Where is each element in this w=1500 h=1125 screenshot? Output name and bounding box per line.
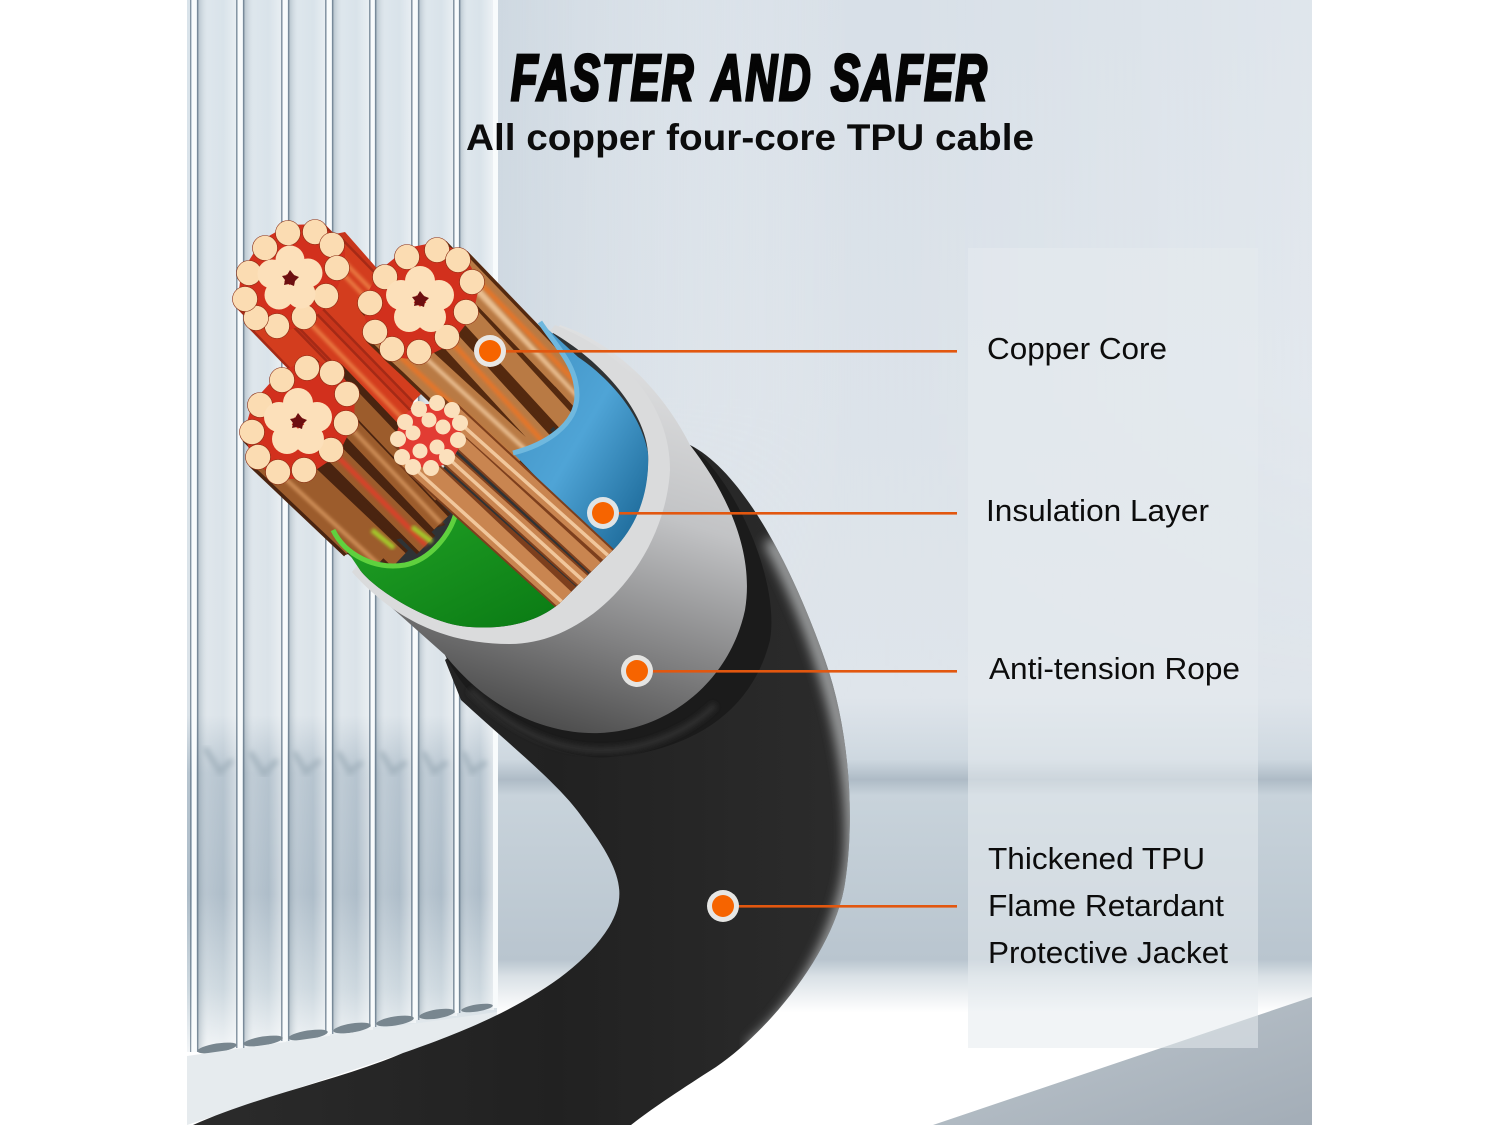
callout: protective jacket — [707, 841, 1228, 970]
title: FASTER AND SAFER — [511, 41, 989, 114]
callout: insulation layer — [587, 493, 1209, 529]
strand end faces: core 3 — [240, 356, 360, 484]
copper wires: red-orange core — [236, 224, 421, 423]
callout: insulation layer: Insulation Layer — [986, 493, 1209, 528]
callout: anti-tension rope — [621, 651, 1240, 687]
green insulation layer — [333, 513, 560, 628]
strand end faces: core 1 — [232, 220, 350, 338]
cable opening — [360, 333, 648, 628]
callout: anti-tension rope: Anti-tension Rope — [989, 651, 1240, 686]
strand end faces: core 4 — [390, 395, 468, 476]
background scene — [187, 0, 1312, 1125]
callout: protective jacket: Thickened TPU — [988, 841, 1205, 876]
glass columns — [187, 0, 498, 1125]
callout: copper core: Copper Core — [987, 331, 1167, 366]
copper wires: thin front core — [392, 396, 614, 607]
callout: protective jacket: Flame Retardant — [988, 888, 1224, 923]
panel: label backing — [968, 731, 1258, 1048]
copper wires: lower left core — [250, 368, 445, 564]
jacket collar ring — [445, 445, 771, 757]
sleeve rim — [352, 325, 670, 644]
gray anti-tension sleeve — [355, 325, 747, 733]
cable outer jacket — [193, 445, 853, 1125]
strand end faces: core 2 — [358, 238, 484, 364]
blue insulation layer — [513, 322, 648, 553]
callout: copper core — [474, 331, 1167, 367]
callout: protective jacket: Protective Jacket — [988, 935, 1228, 970]
subtitle: All copper four-core TPU cable — [466, 117, 1034, 158]
copper wires: rear right core — [368, 250, 587, 465]
